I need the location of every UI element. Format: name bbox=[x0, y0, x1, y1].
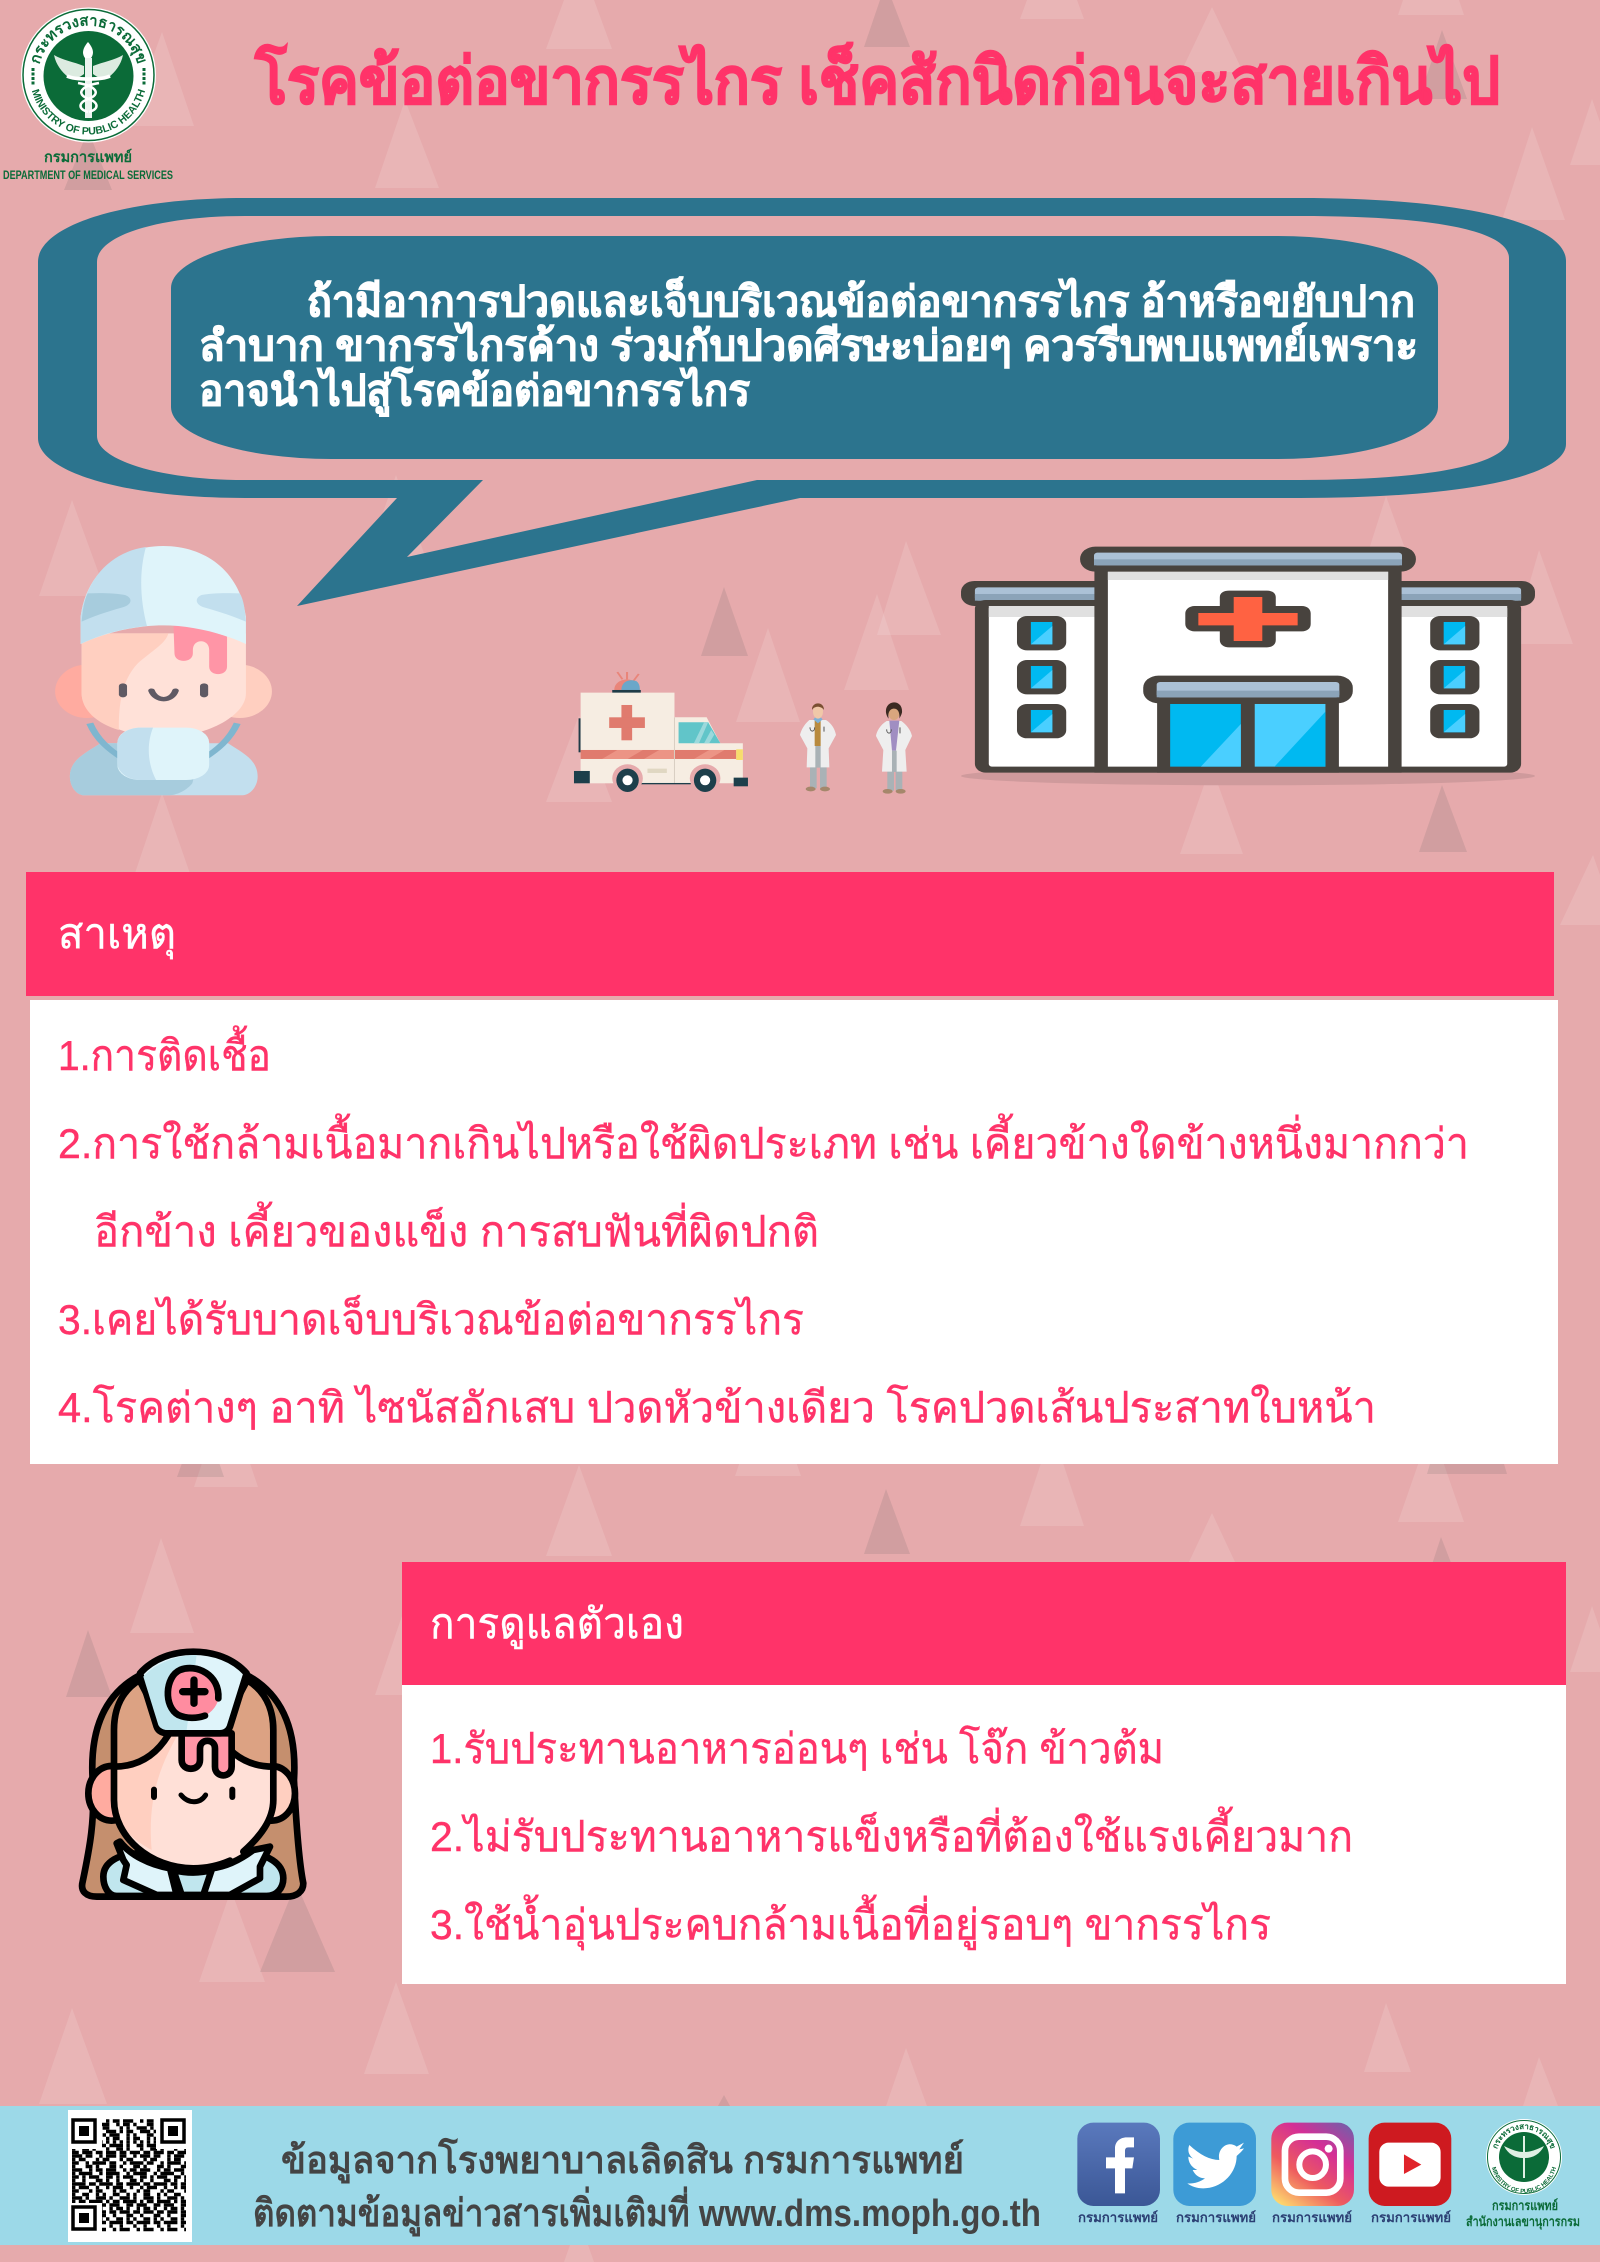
social labels: กรมการแพทย์ bbox=[1078, 2210, 1158, 2225]
small seal and label bbox=[1466, 2119, 1580, 2230]
icon: youtube bbox=[1369, 2123, 1451, 2206]
icon: twitter bbox=[1173, 2123, 1256, 2206]
callout: intro text: ลำบาก ขากรรไกรค้าง ร่วมกับปวดศีรษะบ่อยๆ ควรรีบพบแพทย์เพราะ bbox=[199, 321, 1418, 369]
footer text: source: ข้อมูลจากโรงพยาบาลเลิดสิน กรมการแพทย์ bbox=[281, 2137, 964, 2184]
callout: intro text bbox=[171, 236, 1438, 459]
icon: ambulance bbox=[574, 672, 748, 792]
list: causes bbox=[30, 1000, 1558, 1464]
list: self care: 1.รับประทานอาหารอ่อนๆ เช่น โจ๊ก ข้าวต้ม bbox=[430, 1724, 1164, 1772]
list: causes: 3.เคยได้รับบาดเจ็บบริเวณข้อต่อขากรรไกร bbox=[58, 1295, 804, 1343]
icon: female doctor bbox=[876, 702, 912, 794]
entrance doors bbox=[1143, 676, 1353, 773]
list: self care bbox=[402, 1685, 1566, 1984]
heading bar: causes bbox=[26, 872, 1554, 996]
logo: Ministry of Public Health seal: กระทรวงสาธารณสุข bbox=[32, 16, 146, 64]
logo: Ministry of Public Health seal: กรมการแพทย์ bbox=[44, 148, 132, 166]
icon: nurse bbox=[82, 1652, 303, 1897]
footer text: follow us: ติดตามข้อมูลข่าวสารเพิ่มเติมที่ www.dms.moph.go.th bbox=[253, 2186, 1041, 2237]
small seal and label: กระทรวงสาธารณสุข bbox=[1493, 2124, 1556, 2149]
heading bar: causes: สาเหตุ bbox=[58, 910, 176, 960]
logo: Ministry of Public Health seal: MINISTRY OF PUBLIC HEALTH bbox=[32, 89, 145, 134]
small seal and label: MINISTRY OF PUBLIC HEALTH bbox=[1492, 2166, 1556, 2193]
icon: red cross bbox=[1185, 591, 1311, 647]
list: self care: 2.ไม่รับประทานอาหารแข็งหรือที่ต้องใช้แรงเคี้ยวมาก bbox=[430, 1806, 1353, 1860]
logo: Ministry of Public Health seal: DEPARTMENT OF MEDICAL SERVICES bbox=[3, 168, 173, 182]
icon: facebook bbox=[1077, 2123, 1160, 2206]
icon: instagram bbox=[1271, 2123, 1354, 2206]
QR code bbox=[68, 2110, 192, 2242]
heading bar: self care: การดูแลตัวเอง bbox=[430, 1600, 684, 1649]
panel: self care bbox=[402, 1562, 1566, 1984]
callout: intro text: อาจนำไปสู่โรคข้อต่อขากรรไกร bbox=[199, 366, 750, 417]
title: โรคข้อต่อขากรรไกร เช็คสักนิดก่อนจะสายเกินไป bbox=[254, 43, 1500, 117]
logo: Ministry of Public Health seal bbox=[3, 8, 173, 182]
social labels: กรมการแพทย์ bbox=[1272, 2210, 1352, 2225]
list: causes: 1.การติดเชื้อ bbox=[58, 1025, 271, 1079]
heading bar: self care bbox=[402, 1562, 1566, 1686]
footer band bbox=[0, 2106, 1600, 2245]
icon: hospital building bbox=[961, 547, 1535, 785]
callout: intro text: ถ้ามีอาการปวดและเจ็บบริเวณข้อต่อขากรรไกร อ้าหรือขยับปาก bbox=[307, 276, 1415, 325]
social labels bbox=[1078, 2210, 1451, 2225]
small seal and label: กรมการแพทย์ bbox=[1492, 2198, 1558, 2213]
icon: male doctor bbox=[800, 703, 836, 791]
list: self care: 3.ใช้น้ำอุ่นประคบกล้ามเนื้อที่อยู่รอบๆ ขากรรไกร bbox=[430, 1894, 1271, 1951]
social labels: กรมการแพทย์ bbox=[1371, 2210, 1451, 2225]
social labels: กรมการแพทย์ bbox=[1176, 2210, 1256, 2225]
icon: patient wearing cap and mask bbox=[55, 546, 272, 795]
small seal and label: สำนักงานเลขานุการกรม bbox=[1466, 2214, 1580, 2230]
list: causes: 4.โรคต่างๆ อาทิ ไซนัสอักเสบ ปวดหัวข้างเดียว โรคปวดเส้นประสาทใบหน้า bbox=[58, 1383, 1376, 1431]
panel: causes bbox=[26, 872, 1558, 1464]
list: causes: 2.การใช้กล้ามเนื้อมากเกินไปหรือใช้ผิดประเภท เช่น เคี้ยวข้างใดข้างหนึ่งมากกว่า bbox=[58, 1113, 1469, 1167]
speech bubble outline bbox=[38, 198, 1566, 606]
list: causes: อีกข้าง เคี้ยวของแข็ง การสบฟันที่ผิดปกติ bbox=[94, 1201, 819, 1255]
